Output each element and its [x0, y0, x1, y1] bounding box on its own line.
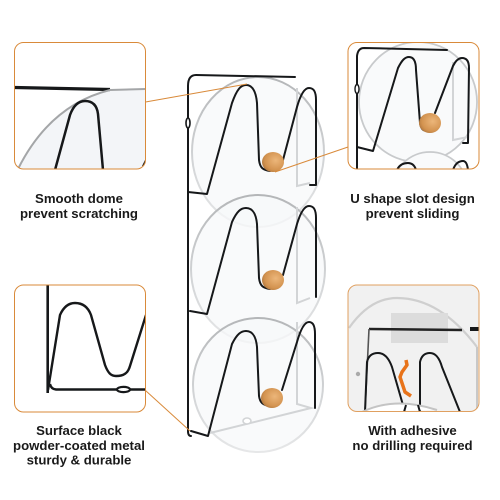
glass lid 2 — [191, 195, 325, 343]
caption: black coated metal: sturdy & durable — [27, 452, 131, 468]
connector line: coating — [146, 390, 190, 431]
panel: black coated metal — [14, 285, 146, 413]
caption: U shape slot: prevent sliding — [366, 206, 459, 221]
caption: black coated metal: Surface black — [36, 423, 122, 438]
caption: adhesive: With adhesive — [368, 423, 457, 438]
wooden knob 1 — [262, 152, 284, 172]
glass lid 3 — [193, 318, 323, 452]
wooden knob 3 — [261, 388, 283, 408]
caption: adhesive: no drilling required — [352, 438, 473, 453]
wire slot 1 — [188, 85, 316, 194]
caption: smooth dome: Smooth dome — [35, 191, 123, 206]
panel: adhesive — [348, 285, 480, 413]
wire slot 3 — [191, 322, 315, 436]
connector line: slot — [275, 147, 348, 172]
wire slot 2 — [190, 206, 316, 314]
rack frame — [188, 75, 295, 436]
connector line: dome — [146, 84, 247, 102]
caption: U shape slot: U shape slot design — [350, 191, 475, 206]
panel: smooth dome — [14, 42, 146, 170]
caption: smooth dome: prevent scratching — [20, 206, 138, 221]
frame eyelet — [186, 118, 190, 128]
panel: U shape slot — [348, 42, 480, 170]
product: wall-mounted lid rack — [186, 75, 325, 452]
glass lid 1 — [192, 77, 324, 227]
bracket eyelet — [243, 418, 251, 424]
rear brackets — [210, 88, 311, 433]
wooden knob 2 — [262, 270, 284, 290]
caption: black coated metal: powder-coated metal — [13, 438, 145, 453]
